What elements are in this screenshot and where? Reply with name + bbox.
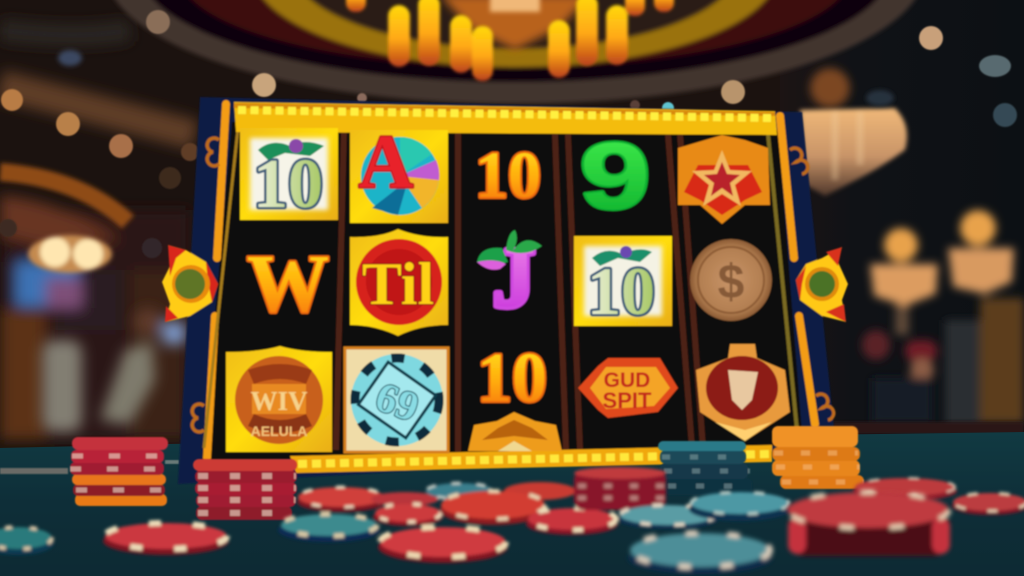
chip: red middle — [297, 487, 385, 512]
symbol: green nine: 9 — [580, 123, 650, 228]
cabinet — [178, 97, 836, 484]
chandelier: right blurred — [800, 68, 907, 196]
table: green felt — [0, 422, 1024, 576]
symbol: W: W — [247, 238, 329, 329]
top marquee — [234, 102, 777, 135]
left seating figures — [42, 308, 185, 432]
symbol: fruit ten tile centre: 10 — [587, 253, 655, 329]
chip: blue front — [278, 514, 380, 542]
reel dividers — [336, 130, 703, 452]
symbol: orange ten bottom: 10 — [477, 340, 547, 417]
chip: far left teal — [0, 527, 54, 555]
bottom marquee — [290, 445, 772, 473]
blurred lamps right — [862, 210, 1024, 425]
symbol: bronze coin: $ — [718, 256, 745, 309]
chips: left red stack — [70, 437, 168, 506]
symbol: WIV AELULA badge tile — [226, 346, 332, 452]
symbol: poker chip tile: 69 — [369, 374, 425, 432]
reels window — [202, 122, 803, 462]
chip: teal right — [618, 505, 718, 529]
symbol: fruit ten tile top left: 10 — [253, 146, 323, 223]
ceiling and left wall — [0, 30, 195, 440]
chip: large red stack right — [787, 492, 950, 556]
chips: orange stack — [772, 426, 864, 489]
chips: scattered flat chips — [0, 467, 1024, 563]
symbol: orange ten top: 10 — [475, 139, 541, 212]
symbol: poker chip tile — [345, 348, 448, 452]
chips: second red stack — [193, 459, 297, 520]
side medallion right — [796, 247, 848, 322]
chip: red centre front — [526, 508, 618, 535]
chip: red front centre — [378, 527, 508, 563]
chip: red centre back — [504, 482, 576, 500]
chip: red far right — [952, 493, 1024, 515]
ceiling arch left — [0, 172, 128, 222]
symbol: fruit ten tile centre — [574, 236, 672, 329]
symbol: GUD SPIT banner: SPIT — [603, 388, 652, 413]
symbol: Til red badge tile: Til — [362, 251, 434, 317]
symbol: partial gold crown — [468, 412, 562, 451]
scroll ornaments — [192, 138, 834, 432]
chip: red centre large — [440, 491, 546, 525]
warm lights left — [28, 235, 112, 273]
symbol: fruit ten tile top left — [240, 128, 338, 223]
chip: teal right 2 — [689, 492, 791, 521]
chip: red right back — [853, 478, 957, 501]
chips: teal stack — [658, 441, 752, 495]
chip: red front left — [103, 523, 229, 555]
slot machine — [162, 97, 848, 484]
symbol: GUD SPIT banner: GUD — [604, 369, 650, 392]
chip: teal back — [426, 483, 494, 499]
chip: red small stack — [574, 467, 666, 510]
chip: teal front blurred — [628, 533, 772, 574]
chip: red middle 2 — [373, 504, 443, 526]
symbol: purple J with leaves — [477, 229, 542, 325]
symbol: star badge — [678, 135, 770, 224]
symbol: GUD SPIT banner — [578, 358, 678, 418]
symbol: letter A tile: A — [359, 120, 414, 204]
symbol: WIV AELULA badge tile: AELULA — [251, 423, 307, 439]
symbol: bronze coin — [690, 239, 772, 321]
symbol: Til red badge tile — [350, 229, 448, 336]
side trims — [207, 104, 815, 458]
symbol: WIV AELULA badge tile: WIV — [250, 386, 308, 416]
chip: red back — [371, 492, 439, 506]
symbol: letter A tile — [350, 120, 448, 223]
symbol: purple J with leaves: J — [492, 229, 536, 325]
side medallion left — [162, 245, 218, 322]
bokeh lights — [0, 10, 1017, 258]
chandelier: top centre — [105, 0, 925, 104]
symbol: shield badge — [696, 344, 790, 441]
